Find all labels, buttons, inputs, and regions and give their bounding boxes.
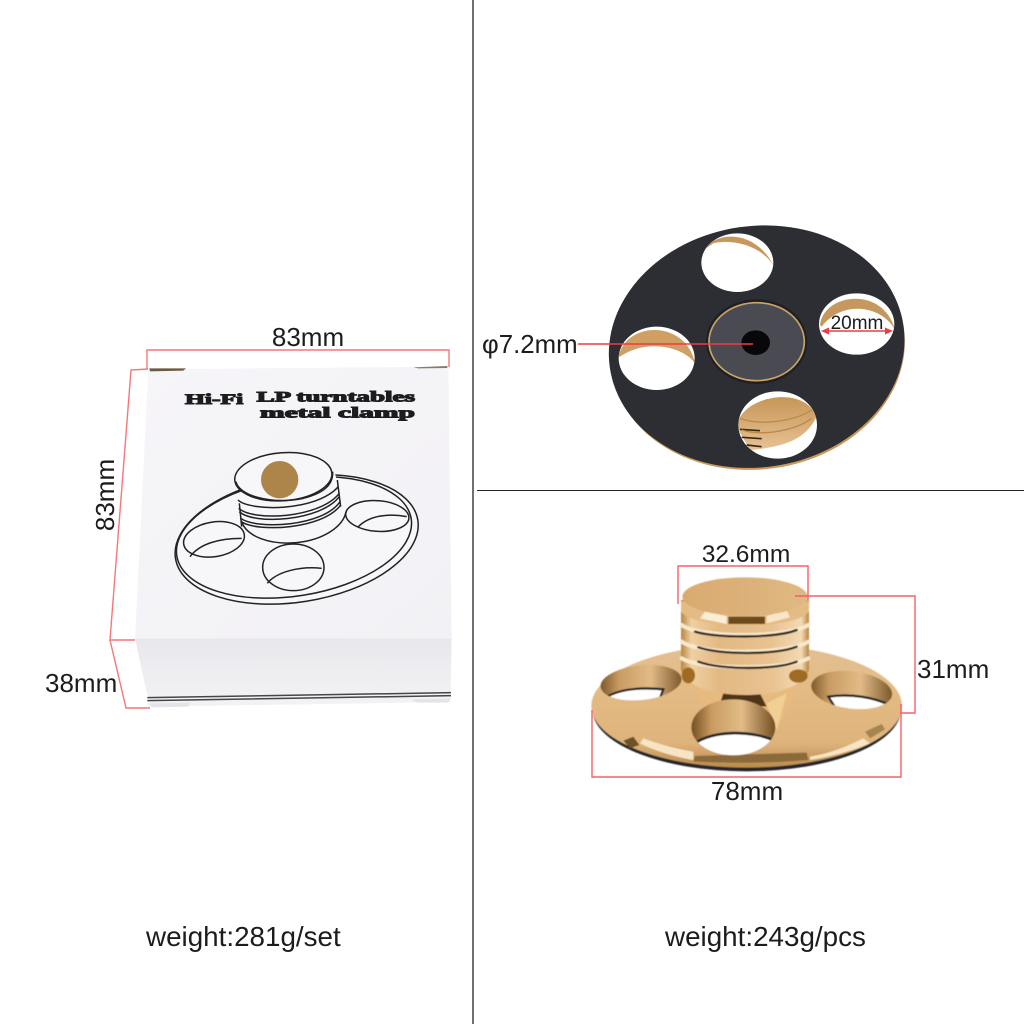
box top face [135,366,452,638]
box printed title: metal clamp [260,406,415,422]
gold rim [595,210,921,489]
right hole [819,293,894,355]
horizontal divider [477,490,1024,492]
box printed title [185,390,416,422]
box gold dot [261,461,298,498]
dimension: box width: 83mm [272,322,344,352]
box line drawing of clamp [166,449,428,620]
dimension: cap diameter [678,541,808,604]
left hole [618,326,695,390]
bottom hole with threads [737,390,820,460]
dimension: base diameter [592,704,901,806]
front hole [690,697,777,757]
top hole [701,233,774,292]
panel: clamp underside [483,225,905,470]
underside disc [608,225,905,470]
base plate [591,644,902,768]
vertical divider [472,0,474,1024]
black felt disc [593,207,920,487]
box illustration [135,366,452,707]
base highlights [623,724,885,763]
dimension: base diameter: 78mm [711,776,783,806]
dimension: cap diameter: 32.6mm [702,541,790,568]
dimension: box depth: 83mm [90,459,120,531]
panel: clamp side view [591,541,989,952]
dimension: clamp height: 31mm [917,654,989,684]
dimension: clamp height [795,596,989,713]
dimension: box height: 38mm [45,668,117,698]
dimension: opening width: 20mm [831,313,883,334]
pillar body [681,600,809,695]
centre recess [706,299,807,384]
weight: set: weight:281g/set [145,921,341,952]
box printed title: Hi-Fi [185,392,243,408]
pillar flare [693,687,797,730]
panel: packaging box [45,322,452,952]
cap top [682,577,808,616]
cap edge [681,602,809,625]
right hole [810,670,893,710]
thread grooves [682,625,808,668]
dimension: box width [147,322,449,369]
felt underlayer [592,647,901,771]
dimension: hole diameter: φ7.2mm [482,331,578,359]
pillar side accents [682,667,808,683]
box side face [135,638,452,707]
weight: piece: weight:243g/pcs [664,921,866,952]
dimension: box depth [90,369,148,640]
left hole [600,665,682,702]
dimension: box height [45,640,150,708]
box printed title: LP turntables [257,390,416,406]
centre hole [741,330,770,355]
gold clamp [591,577,902,771]
